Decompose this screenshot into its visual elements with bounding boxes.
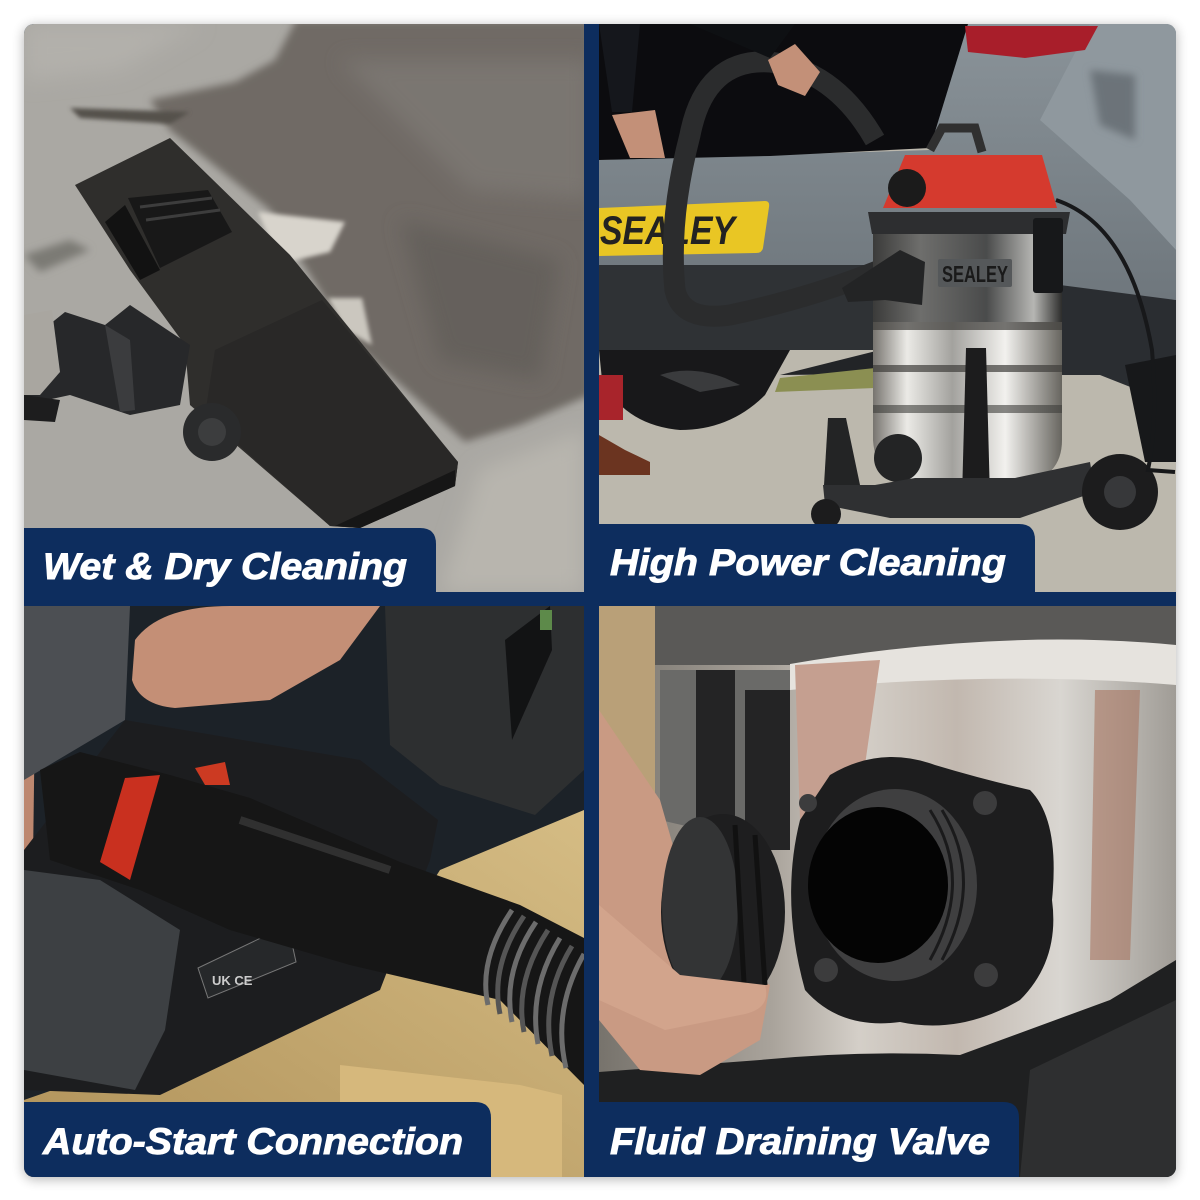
- drain cap and hand: [599, 710, 785, 1075]
- photo: concrete floor with wet patch: [24, 20, 590, 592]
- battery pack: [385, 606, 584, 815]
- corrugated hose: [486, 910, 584, 1068]
- label: wet and dry cleaning: [24, 528, 436, 592]
- vacuum hose: [673, 62, 880, 316]
- label: high power cleaning: [599, 524, 1035, 592]
- wet and dry vacuum: [811, 128, 1175, 530]
- label: auto-start connection: [24, 1102, 491, 1177]
- photo: car boot and driveway: [599, 24, 1176, 592]
- licence plate: SEALEY: [600, 209, 738, 253]
- label: high power cleaning: High Power Cleaning: [610, 542, 1006, 583]
- hose connector: [40, 752, 584, 1085]
- hand: [132, 606, 380, 708]
- label: wet and dry cleaning: Wet & Dry Cleaning: [43, 546, 407, 587]
- photo: stainless drum reflection: [599, 606, 1176, 1177]
- rating label: [198, 938, 296, 998]
- vacuum brand badge: SEALEY: [942, 261, 1008, 287]
- photo: workshop scene: [24, 606, 584, 1177]
- icon: floor nozzle: [24, 138, 458, 528]
- arms and hands: [599, 24, 820, 158]
- label: fluid draining valve: [599, 1102, 1019, 1177]
- panel: wet and dry cleaning: [24, 20, 590, 592]
- rating label: UK CE: [212, 973, 253, 988]
- panel: auto-start connection: [24, 606, 584, 1177]
- panel: fluid draining valve: [599, 606, 1176, 1177]
- panel: high power cleaning: [599, 24, 1176, 592]
- label: auto-start connection: Auto-Start Connection: [42, 1121, 463, 1162]
- vacuum brand badge: [938, 259, 1012, 287]
- valve flange: [791, 757, 1054, 1026]
- label: fluid draining valve: Fluid Draining Valve: [610, 1121, 990, 1162]
- vacuum body: [24, 720, 438, 1095]
